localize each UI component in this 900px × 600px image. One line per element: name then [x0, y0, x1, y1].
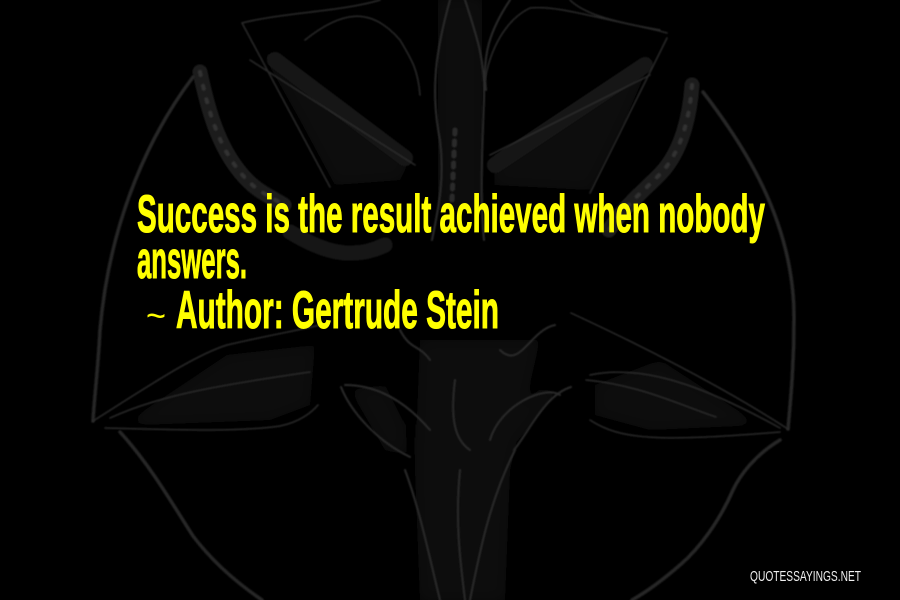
star bands — [275, 60, 645, 165]
soft body fills — [130, 0, 760, 600]
horn band texture — [200, 72, 692, 230]
wing lines — [93, 313, 788, 438]
author attribution — [146, 281, 499, 340]
central column — [432, 0, 510, 240]
horn bands — [200, 72, 692, 253]
faint pentagram artwork — [93, 0, 794, 600]
outer circle arcs — [93, 77, 794, 600]
quote text — [137, 185, 765, 290]
quote text: answers. — [137, 231, 247, 290]
tilde: ~ — [146, 295, 166, 336]
hands and lower body — [341, 325, 571, 600]
author name: Author: Gertrude Stein — [176, 281, 499, 340]
star edge lines — [242, 0, 667, 193]
